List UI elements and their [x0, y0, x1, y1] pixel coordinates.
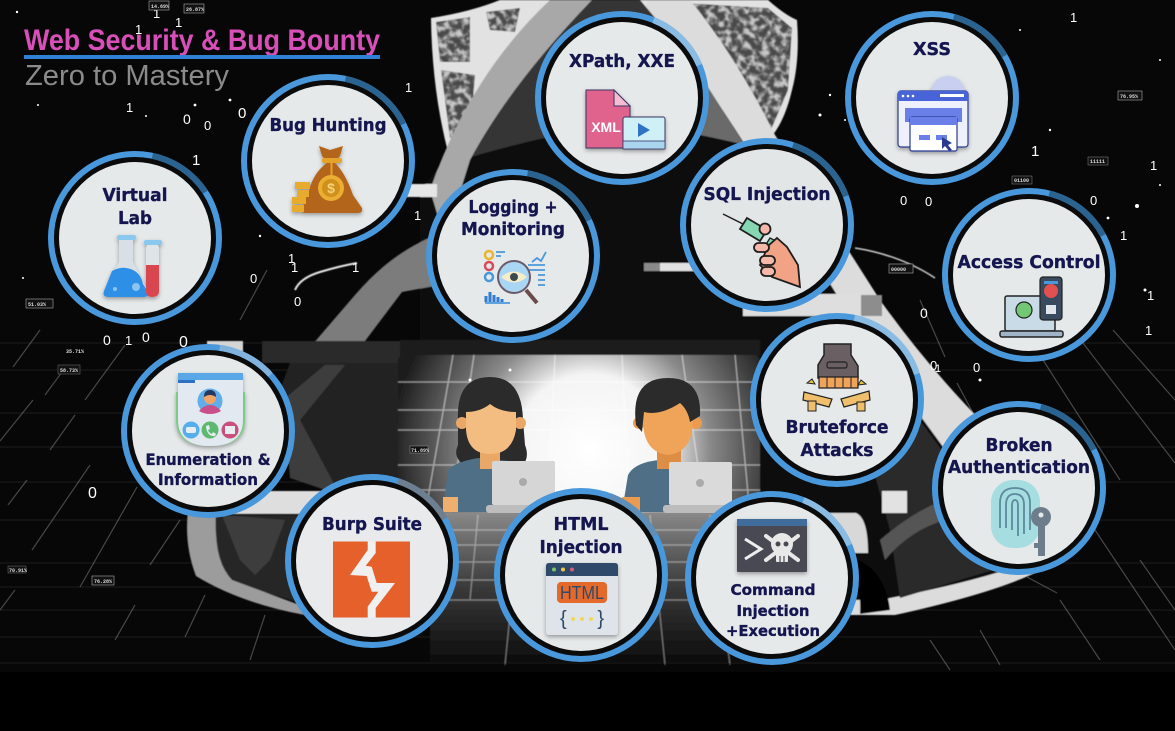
ring: [51, 154, 219, 322]
data particles: 0: [142, 329, 150, 345]
data labels: 76.28%: [94, 579, 112, 585]
character: man: [620, 378, 737, 513]
panel: Bug Hunting: [244, 77, 412, 245]
hood left grey band: [430, 0, 592, 240]
icon: browser windows: [898, 76, 968, 151]
label second line: Information: [158, 470, 258, 489]
lower bar: [743, 294, 863, 316]
data particles: 1: [414, 208, 421, 223]
icon: magnifying eye with charts: [485, 251, 546, 303]
data labels: 01100: [1014, 178, 1029, 184]
panel: SQL Injection: [683, 141, 851, 309]
hood upper dark wedge: [468, 0, 745, 158]
data particles: 0: [183, 111, 191, 127]
shield patches: [436, 3, 792, 138]
icon: fingerprint and key: [991, 480, 1051, 556]
data particles: 1: [352, 260, 359, 275]
icon: xml file and video: [586, 90, 665, 149]
ring: [935, 404, 1103, 572]
label second line: Monitoring: [461, 219, 565, 240]
data particles: 1: [291, 260, 298, 275]
data particles: 0: [204, 118, 211, 133]
data particles: 1: [153, 6, 160, 21]
label: Virtual: [102, 185, 168, 206]
panel: Logging + Monitoring: [429, 172, 597, 340]
wheel shape: [845, 555, 890, 614]
data particles: 1: [125, 333, 132, 348]
data particles: 0: [238, 105, 246, 122]
cloak right highlight: [880, 495, 960, 560]
label: Broken: [986, 435, 1052, 456]
data particles: 0: [920, 305, 928, 321]
icon: html window: HTML: [560, 583, 604, 603]
label: SQL Injection: [704, 184, 830, 205]
panel: Virtual Lab: [51, 154, 219, 322]
label second line: Injection: [736, 602, 810, 620]
icon: html window: [546, 563, 618, 635]
data labels: 26.87%: [186, 7, 204, 13]
label: Burp Suite: [322, 514, 422, 535]
hood white outer band: [640, 0, 1045, 615]
panel: Access Control: [945, 191, 1113, 359]
cloak left blotch: [222, 515, 285, 575]
centre bar white: [660, 263, 710, 271]
icon: burp suite logo: [333, 542, 410, 618]
label: Bruteforce: [786, 417, 888, 438]
data particles: 1: [1088, 284, 1095, 299]
icon: fist breaking board: [803, 344, 870, 411]
data particles: 1: [935, 363, 941, 375]
label: Bug Hunting: [270, 115, 386, 136]
label: XPath, XXE: [569, 51, 675, 72]
data labels: [8, 1, 1142, 585]
label: XSS: [913, 39, 951, 60]
icon: syringe in hand: [723, 214, 800, 287]
data particles: [88, 6, 1157, 502]
data particles: 1: [1031, 143, 1039, 160]
data particles: 0: [88, 485, 97, 502]
dark bar left: [262, 341, 400, 363]
data particles: 1: [126, 100, 133, 115]
curve line right: [855, 248, 935, 278]
data particles: 0: [900, 193, 907, 208]
cloak left inner: [214, 515, 330, 612]
floor reflection: [430, 512, 770, 662]
block near command: [823, 513, 868, 553]
label: Command: [730, 581, 816, 599]
data particles: 1: [1070, 10, 1077, 25]
central glowing screen: [398, 355, 760, 515]
panel: Enumeration & Information: [124, 347, 292, 515]
data particles: 0: [925, 194, 932, 209]
shield frame: [431, 0, 798, 152]
data particles: 1: [175, 15, 182, 30]
icon: flask and test tube: [104, 235, 162, 297]
data labels: 00000: [891, 267, 906, 273]
data particles: 1: [135, 22, 142, 37]
label: HTML: [554, 514, 608, 535]
ring: [848, 14, 1016, 182]
data particles: 1: [1120, 228, 1127, 243]
characters at laptops: [443, 377, 737, 513]
panel: XPath, XXE: [538, 14, 706, 182]
centre bar grey: [644, 263, 660, 271]
data particles: 0: [1000, 196, 1008, 212]
data labels: 71.89%: [411, 448, 429, 454]
icon: html window: { }: [560, 608, 604, 630]
hood grey inner shade: [700, 75, 800, 235]
bar near bug hunting: [405, 184, 437, 197]
data labels: 58.73%: [60, 368, 78, 374]
ring: [945, 191, 1113, 359]
title block: [24, 24, 380, 92]
icon: laptop and phone: [1000, 277, 1063, 337]
ring: [753, 316, 921, 484]
label second line: Lab: [118, 208, 152, 229]
small bar upper left: [207, 341, 243, 353]
data particles: 1: [192, 152, 200, 169]
panel: Broken Authentication: [935, 404, 1103, 572]
data particles: 0: [1090, 193, 1097, 208]
label: Enumeration &: [146, 450, 271, 469]
label: Logging +: [468, 197, 558, 218]
hood interior: [420, 0, 1012, 600]
ring: [124, 347, 292, 515]
icon: money bag: $: [327, 180, 335, 196]
data particles: 0: [179, 334, 188, 351]
panel: Burp Suite: [288, 477, 456, 645]
data particles: 0: [973, 360, 980, 375]
data particles: 0: [103, 332, 111, 348]
data particles: 0: [294, 294, 301, 309]
bottom black bar: [0, 672, 1175, 731]
data particles: 0: [930, 358, 937, 373]
body left dark: [265, 363, 400, 495]
data labels: 70.91%: [9, 568, 27, 574]
label second line: Injection: [540, 537, 622, 558]
data particles: 1: [1145, 323, 1152, 338]
background: hooded figure: [187, 0, 1045, 665]
chin band above screen: [400, 340, 760, 356]
data labels: 35.71%: [66, 349, 84, 355]
grey square: [861, 295, 882, 316]
body left folds: [283, 365, 345, 495]
icon: terminal with skull: [737, 519, 807, 572]
title: Web Security & Bug Bounty: [24, 24, 380, 57]
label: Access Control: [958, 252, 1100, 273]
white dots: [16, 11, 1161, 382]
background: perspective grid: [0, 270, 1175, 670]
data labels: 51.03%: [28, 302, 46, 308]
subtitle: Zero to Mastery: [25, 60, 229, 92]
ring: [688, 494, 856, 662]
white bar left: [233, 491, 333, 514]
cloak right dark folds: [860, 400, 1010, 598]
data labels: 11111: [1090, 159, 1105, 165]
label second line: Attacks: [800, 440, 874, 461]
white square: [882, 491, 907, 513]
ring: [497, 491, 665, 659]
character: woman: [443, 377, 560, 513]
label third line: +Execution: [726, 622, 820, 640]
floor lines: [430, 515, 770, 665]
data labels: 76.95%: [1120, 94, 1138, 100]
ring: [429, 172, 597, 340]
data particles: 0: [250, 271, 257, 286]
panel: HTML Injection: [497, 491, 665, 659]
ring: [244, 77, 412, 245]
ring: [683, 141, 851, 309]
ring: [288, 477, 456, 645]
data particles: 1: [288, 251, 295, 266]
panel: Bruteforce Attacks: [753, 316, 921, 484]
title underline: [24, 55, 380, 59]
icon: xml file and video: XML: [591, 119, 621, 135]
label second line: Authentication: [948, 457, 1090, 478]
ring: [538, 14, 706, 182]
panel: Command Injection + Execution: [688, 494, 856, 662]
icon: money bag: [292, 146, 362, 213]
data particles: 1: [405, 80, 412, 95]
cloak left band: [187, 510, 305, 615]
shoulder left grey: [312, 232, 445, 345]
screen grid: [398, 355, 760, 515]
curve line left: [295, 263, 357, 290]
data particles: 1: [1147, 288, 1154, 303]
shield texture: [436, 3, 792, 138]
data labels: 14.69%: [151, 4, 169, 10]
panel: XSS: [848, 14, 1016, 182]
icon: contact profile window: [176, 373, 245, 446]
data particles: 1: [1150, 158, 1157, 173]
